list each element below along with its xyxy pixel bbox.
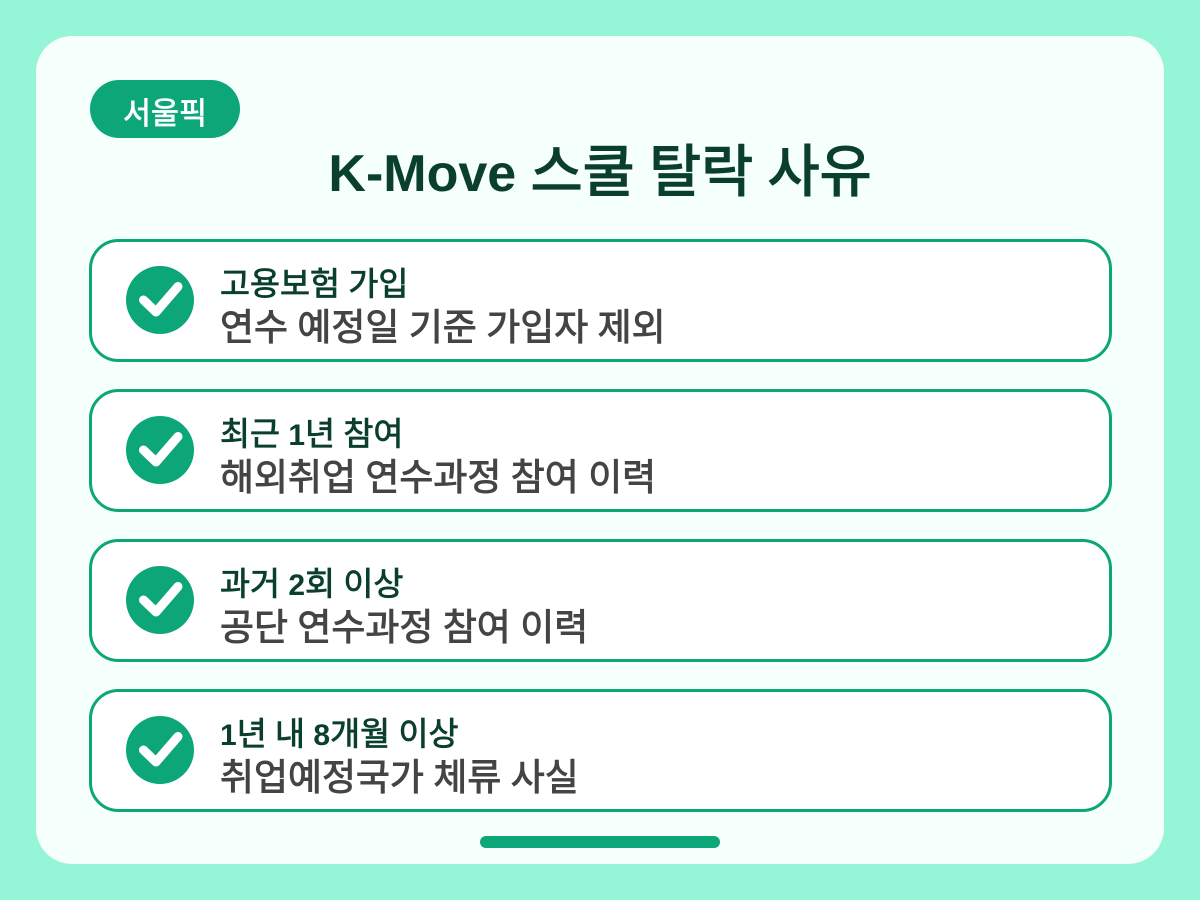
text 3: 공단 연수과정 참여 이력 [220, 607, 588, 648]
text 4: 취업예정국가 체류 사실 [220, 757, 579, 798]
panel: item 1 [88, 238, 1112, 362]
icon: check 3 [126, 566, 194, 634]
title: K-Move 스쿨 탈락 사유 [328, 140, 872, 203]
text 1: 연수 예정일 기준 가입자 제외 [220, 307, 666, 348]
icon: check 1 [126, 266, 194, 334]
bottom bar [480, 836, 720, 848]
heading 1: 고용보험 가입 [220, 265, 408, 302]
text 2: 해외취업 연수과정 참여 이력 [220, 457, 656, 498]
icon: check 2 [126, 416, 194, 484]
heading 2: 최근 1년 참여 [220, 415, 403, 452]
panel: item 2 [88, 388, 1112, 512]
panel: item 3 [88, 538, 1112, 662]
icon: check 4 [126, 716, 194, 784]
panel: item 4 [88, 688, 1112, 812]
heading 4: 1년 내 8개월 이상 [220, 715, 458, 752]
badge [90, 80, 240, 138]
badge: 서울픽 [123, 97, 207, 131]
heading 3: 과거 2회 이상 [220, 565, 403, 602]
